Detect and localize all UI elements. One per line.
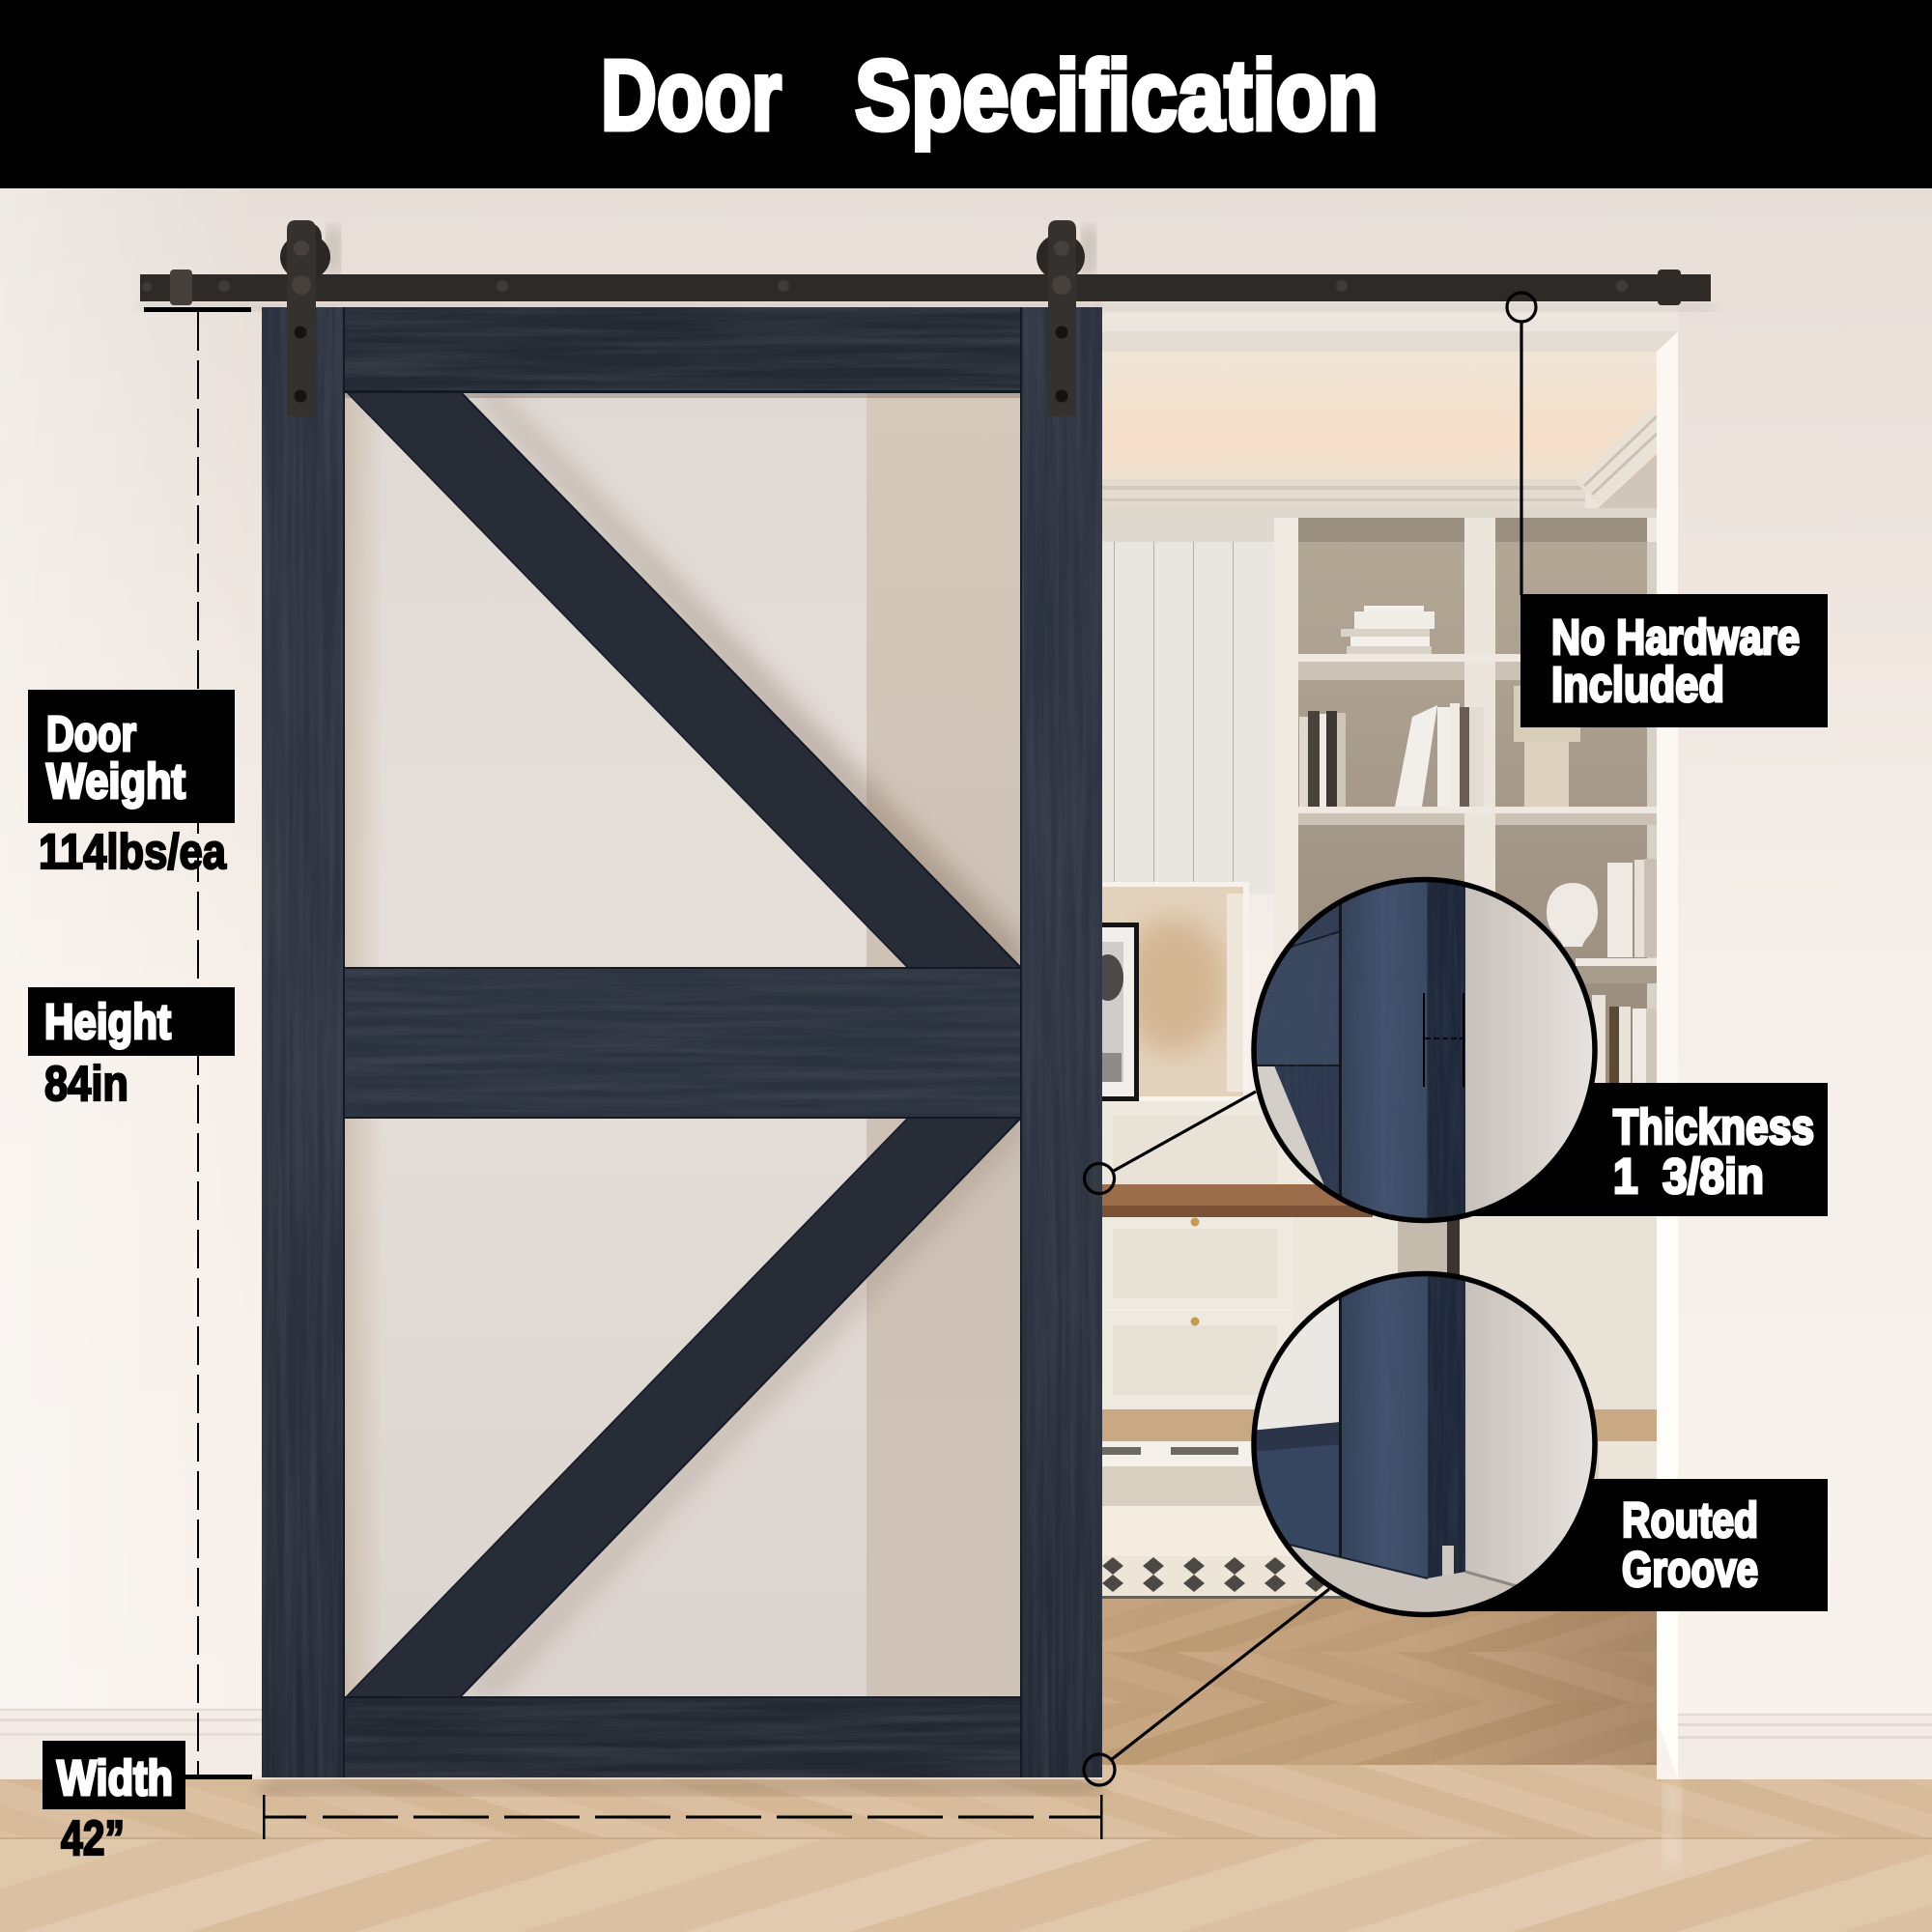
left stop — [170, 270, 192, 305]
crown moulding — [1102, 403, 1657, 518]
door casing — [1657, 331, 1678, 1779]
diagonal brace top — [346, 391, 1021, 968]
lintel and ceiling — [1102, 301, 1678, 479]
right hanger — [1037, 220, 1085, 416]
baseboard — [0, 1708, 1932, 1779]
shelf unit — [1274, 518, 1657, 1122]
rail — [140, 274, 1711, 301]
callout: routed groove: Groove — [1622, 1542, 1758, 1597]
title — [601, 40, 1378, 151]
callout: thickness — [1449, 1083, 1828, 1216]
right stop — [1658, 270, 1681, 305]
title: Door — [601, 40, 781, 151]
callout: no hardware included — [1520, 594, 1828, 727]
height dimension line — [144, 307, 252, 1779]
right stile — [1021, 307, 1102, 1777]
books and decor on shelves — [1299, 606, 1657, 1084]
left hanger — [280, 220, 330, 416]
herringbone wood floor — [0, 1777, 1932, 1932]
callout: width: 42” — [61, 1810, 125, 1865]
callout: height: 84in — [44, 1056, 128, 1111]
bottom rail — [344, 1697, 1021, 1777]
wood grain — [262, 307, 1102, 1777]
room seen through the opening — [1093, 301, 1678, 1779]
framed art — [1093, 882, 1249, 1101]
room floor and rug — [1102, 1409, 1657, 1779]
middle rail — [344, 968, 1021, 1118]
diagonal brace bottom — [346, 1118, 1021, 1697]
rail bolts — [142, 280, 1628, 292]
callout: door weight: 114lbs/ea — [39, 824, 227, 879]
left stile — [262, 307, 344, 1777]
callout: thickness: Thickness — [1613, 1099, 1814, 1154]
callout: width: Width — [57, 1750, 173, 1805]
callout: routed groove: Routed — [1622, 1492, 1758, 1548]
door — [262, 307, 1102, 1777]
callout: door weight: Weight — [46, 753, 185, 809]
thickness callout leader — [1084, 1092, 1256, 1194]
callout: door weight: Door — [46, 706, 136, 761]
callout: no hardware included: No Hardware — [1551, 610, 1800, 665]
callout: routed groove — [1449, 1479, 1828, 1611]
callout: height — [28, 987, 235, 1111]
lens: routed groove detail — [1251, 1270, 1601, 1623]
header bar — [0, 0, 1932, 188]
callout: height: Height — [44, 994, 171, 1049]
hardware callout leader — [1507, 293, 1536, 595]
top rail — [344, 307, 1021, 391]
callout: door weight — [28, 690, 235, 879]
door infill panels — [344, 386, 1043, 1697]
barn door rail hardware — [140, 220, 1711, 416]
sliding rail shadow — [140, 227, 1715, 311]
lower cabinets and counter — [1102, 1101, 1657, 1410]
panelled wall — [1102, 518, 1274, 895]
callout: no hardware included: Included — [1551, 657, 1724, 712]
width dimension line — [263, 1795, 1103, 1839]
groove callout leader — [1084, 1589, 1329, 1785]
title: Specification — [855, 40, 1378, 151]
lens: door thickness detail — [1251, 874, 1601, 1227]
callout: width — [43, 1741, 185, 1865]
callout: thickness: 1 3/8in — [1613, 1149, 1764, 1204]
